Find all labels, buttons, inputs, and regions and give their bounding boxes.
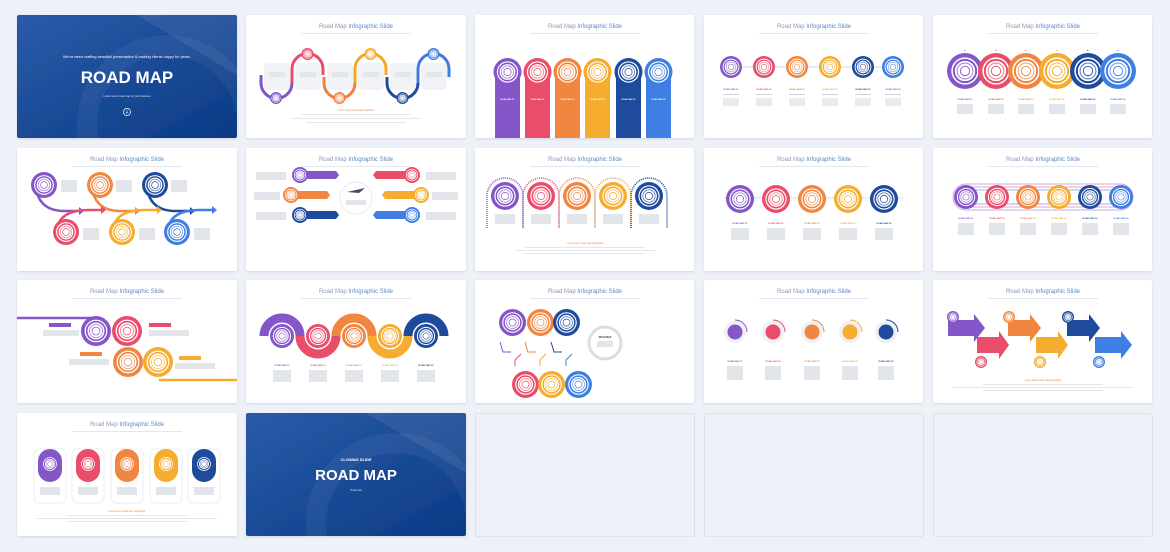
slide 5: large concentric circles: ▸ <box>1025 48 1027 52</box>
slide 5: large concentric circles: ROAD MAP 03 <box>1019 98 1034 101</box>
slide 12: wave band: ROAD MAP 05 <box>419 364 434 367</box>
slide 7: plane center <box>246 148 466 271</box>
slide 5: large concentric circles: ▸ <box>1117 48 1119 52</box>
slide 10: parallel lines: ROAD MAP 04 <box>1052 217 1067 220</box>
slide 4: small circles chain: Road Map Infographic Slide <box>777 24 852 30</box>
slide 14: circles with curved arrows: ROAD MAP 02 <box>766 360 781 363</box>
slide 1: cover: ROAD MAP <box>81 68 173 87</box>
slide 4: small circles chain <box>704 15 923 138</box>
slide 6: spiral arrows <box>17 148 237 271</box>
slide 8: arches: Lorem ipsum road map infographic <box>567 242 604 245</box>
slide 14: circles with curved arrows: ROAD MAP 03 <box>805 360 820 363</box>
slide 12: wave band: ROAD MAP 04 <box>383 364 398 367</box>
slide 14: circles with curved arrows <box>704 280 923 403</box>
slide 1: cover: We've been crafting beautiful presentation & making clients happy for years. <box>63 55 191 59</box>
slide 9: swirl circles: ROAD MAP 05 <box>877 222 892 225</box>
slide 3: vertical bars: ROAD MAP 04 <box>591 98 605 101</box>
slide 10: parallel lines <box>933 148 1152 271</box>
slide 15: chevron arrows: Road Map Infographic Slide <box>1006 289 1081 295</box>
slide 8: arches: Road Map Infographic Slide <box>548 157 623 163</box>
slide 5: large concentric circles: ▸ <box>964 48 966 52</box>
slide 5: large concentric circles: ▸ <box>995 48 997 52</box>
slide 10: parallel lines: ROAD MAP 06 <box>1114 217 1129 220</box>
slide 14: circles with curved arrows: Road Map Infographic Slide <box>777 289 852 295</box>
slide 5: large concentric circles: ROAD MAP 05 <box>1081 98 1096 101</box>
slide 1: cover <box>17 15 247 205</box>
slide 7: plane center: Road Map Infographic Slide <box>319 157 394 163</box>
slide 4: small circles chain: ROAD MAP 06 <box>886 88 901 91</box>
slide 2: wave cards: Lorem ipsum road map infographic <box>338 109 375 112</box>
slide 4: small circles chain: ROAD MAP 03 <box>790 88 805 91</box>
slide 5: large concentric circles: ▸ <box>1056 48 1058 52</box>
slide 5: large concentric circles <box>933 15 1152 138</box>
slide 4: small circles chain: ROAD MAP 01 <box>724 88 739 91</box>
slide 15: chevron arrows <box>933 280 1152 403</box>
slide 3: vertical bars: ROAD MAP 02 <box>531 98 545 101</box>
slide 9: swirl circles <box>704 148 923 271</box>
slide 4: small circles chain: ROAD MAP 05 <box>856 88 871 91</box>
slide 12: wave band <box>246 280 466 403</box>
slide 3: vertical bars: ROAD MAP 03 <box>561 98 575 101</box>
slide 12: wave band: Road Map Infographic Slide <box>319 289 394 295</box>
slide 16: pill shapes: Road Map Infographic Slide <box>90 422 165 428</box>
slide 13: circles with arrows <box>475 280 694 403</box>
slide 9: swirl circles: ROAD MAP 03 <box>805 222 820 225</box>
slide 12: wave band: ROAD MAP 01 <box>275 364 290 367</box>
slide 5: large concentric circles: Road Map Infographic Slide <box>1006 24 1081 30</box>
slide 17: closing: CLOSING SLIDE <box>340 457 372 462</box>
slide 9: swirl circles: ROAD MAP 04 <box>841 222 856 225</box>
slide 2: wave cards <box>246 15 466 138</box>
slide 17: closing: Thank you <box>350 488 363 492</box>
slide 5: large concentric circles: ROAD MAP 04 <box>1050 98 1065 101</box>
slide 15: chevron arrows: Lorem ipsum road map infographic <box>1025 379 1062 382</box>
slide 17: closing <box>246 413 476 552</box>
slide 4: small circles chain: ROAD MAP 02 <box>757 88 772 91</box>
slide 9: swirl circles: Road Map Infographic Slide <box>777 157 852 163</box>
slide 14: circles with curved arrows: ROAD MAP 01 <box>728 360 743 363</box>
slide 17: closing: ROAD MAP <box>315 467 397 484</box>
slide 10: parallel lines: Road Map Infographic Slide <box>1006 157 1081 163</box>
slide 3: vertical bars: ROAD MAP 05 <box>622 98 636 101</box>
slide 11: lines with spirals: Road Map Infographic Slide <box>90 289 165 295</box>
slide 3: vertical bars: ROAD MAP 01 <box>501 98 515 101</box>
slide 6: spiral arrows: Road Map Infographic Slide <box>90 157 165 163</box>
slide 1: cover: Lorem ipsum road map for your business <box>103 94 151 98</box>
slide 5: large concentric circles: ROAD MAP 06 <box>1111 98 1126 101</box>
slide 2: wave cards: Road Map Infographic Slide <box>319 24 394 30</box>
slide 3: vertical bars: ROAD MAP 06 <box>652 98 666 101</box>
slide 13: circles with arrows: Road Map Infographic Slide <box>548 289 623 295</box>
slide 9: swirl circles: ROAD MAP 02 <box>769 222 784 225</box>
slide 5: large concentric circles: ▸ <box>1087 48 1089 52</box>
slide 16: pill shapes <box>17 413 237 536</box>
slide 4: small circles chain: ROAD MAP 04 <box>823 88 838 91</box>
slide 12: wave band: ROAD MAP 02 <box>311 364 326 367</box>
slide 9: swirl circles: ROAD MAP 01 <box>733 222 748 225</box>
slide 8: arches <box>475 148 694 271</box>
slide 14: circles with curved arrows: ROAD MAP 04 <box>843 360 858 363</box>
slide 5: large concentric circles: ROAD MAP 01 <box>958 98 973 101</box>
slide 13: circles with arrows: ROAD MAP <box>599 336 612 339</box>
slide 3: vertical bars: Road Map Infographic Slide <box>548 24 623 30</box>
slide 14: circles with curved arrows: ROAD MAP 05 <box>879 360 894 363</box>
slide 10: parallel lines: ROAD MAP 02 <box>990 217 1005 220</box>
slide 16: pill shapes: Lorem ipsum road map infographic <box>109 510 146 513</box>
slide 10: parallel lines: ROAD MAP 05 <box>1083 217 1098 220</box>
slide 11: lines with spirals <box>17 280 237 403</box>
slide 10: parallel lines: ROAD MAP 01 <box>959 217 974 220</box>
empty placeholder slots <box>476 414 1152 536</box>
slide 12: wave band: ROAD MAP 03 <box>347 364 362 367</box>
slide 10: parallel lines: ROAD MAP 03 <box>1021 217 1036 220</box>
slide 3: vertical bars <box>475 15 694 138</box>
slide 5: large concentric circles: ROAD MAP 02 <box>989 98 1004 101</box>
